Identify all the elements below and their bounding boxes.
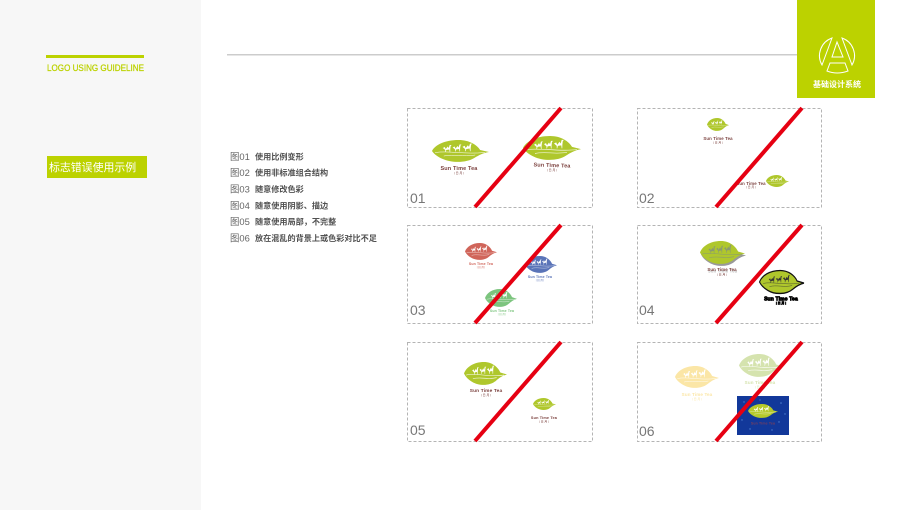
corner badge: basic design system <box>797 0 875 98</box>
list of misuse rules: 图06 <box>230 232 250 243</box>
logo: distorted: | 日 月 | <box>547 168 557 172</box>
section title: logo using guideline: LOGO USING GUIDELINE <box>47 63 144 73</box>
logo: green: | 日 月 | <box>498 312 507 316</box>
logo: pale yellow <box>675 366 719 401</box>
logo: red: Sun Time Tea <box>469 262 493 266</box>
panel number: 01 <box>410 190 426 206</box>
logo: correct: | 日 月 | <box>454 171 464 175</box>
logo: correct: | 日 月 | <box>713 140 723 144</box>
cross-out line <box>716 108 802 207</box>
list of misuse rules: 使用比例变形 <box>255 152 304 162</box>
list of misuse rules: 图02 <box>230 167 250 178</box>
logo: pale yellow: Sun Time Tea <box>682 392 713 397</box>
logo: distorted: Sun Time Tea <box>533 162 571 170</box>
cross-out line <box>475 225 561 323</box>
panel: 04 shadow and outline <box>638 225 822 324</box>
heading tag: logo misuse examples <box>47 156 147 178</box>
logo: black outline: Sun Time Tea <box>764 296 798 302</box>
logo: drop shadow: Sun Time Tea <box>708 268 738 274</box>
icon: A logo <box>819 38 855 73</box>
logo: drop shadow <box>700 241 746 276</box>
logo: correct: Sun Time Tea <box>470 388 502 394</box>
sidebar panel <box>0 0 201 510</box>
cross-out line <box>475 342 561 441</box>
panel number: 03 <box>410 302 426 318</box>
panel number: 05 <box>410 422 426 438</box>
panel number: 02 <box>639 190 655 206</box>
logo: red: | 日 月 | <box>477 265 486 269</box>
logo: correct: | 日 月 | <box>481 393 491 397</box>
logo: blue: | 日 月 | <box>536 278 545 282</box>
logo on busy blue photo: Sun Time Tea <box>751 422 775 426</box>
logo: pale yellow: | 日 月 | <box>692 397 702 401</box>
panel: 06 poor background contrast <box>638 342 822 442</box>
cross-out line <box>475 108 561 207</box>
list of misuse rules: 图01 <box>230 151 250 162</box>
cross-out line <box>716 342 802 441</box>
logo: incomplete: | 日 月 | <box>539 420 549 424</box>
list of misuse rules: 放在混乱的背景上或色彩对比不足 <box>255 233 377 243</box>
list of misuse rules <box>230 151 377 243</box>
logo: drop shadow: Sun Time Tea <box>707 267 737 272</box>
logo: correct: Sun Time Tea <box>703 136 733 141</box>
list of misuse rules: 图03 <box>230 184 250 194</box>
logo: correct <box>464 362 507 397</box>
panel: 03 altered colours <box>408 225 592 324</box>
logo: rearranged <box>736 175 789 189</box>
panel number: 04 <box>639 302 655 318</box>
logo: pale green: | 日 月 | <box>755 385 765 389</box>
logo: green <box>485 289 517 316</box>
panel: 02 non-standard combination <box>638 108 822 208</box>
heading tag: logo misuse examples: 标志错误使用示例 <box>49 160 136 174</box>
logo: incomplete <box>531 398 558 424</box>
logo: correct <box>432 140 489 175</box>
logo on busy blue photo <box>737 396 789 435</box>
logo: drop shadow: | 日 月 | <box>717 272 727 276</box>
logo: blue: Sun Time Tea <box>528 275 552 279</box>
logo: pale green: Sun Time Tea <box>745 380 776 385</box>
list of misuse rules: 使用非标准组合结构 <box>255 168 328 178</box>
cross-out line <box>716 225 802 323</box>
list of misuse rules: 图05 <box>230 216 250 227</box>
logo: black outline: | 日 月 | <box>776 301 786 305</box>
panel: 05 partial use <box>408 342 592 442</box>
list of misuse rules: 随意使用阴影、描边 <box>255 200 328 210</box>
logo: red <box>465 243 497 269</box>
logo: black outline <box>760 270 804 305</box>
logo: green: Sun Time Tea <box>490 309 514 313</box>
logo: blue <box>525 256 557 282</box>
logo: incomplete: Sun Time Tea <box>531 416 558 420</box>
logo: distorted <box>523 136 581 172</box>
list of misuse rules: 随意使用局部，不完整 <box>255 216 336 226</box>
logo: correct <box>703 118 733 144</box>
panel: 01 distorted proportions <box>408 108 592 208</box>
logo: rearranged: Sun Time Tea <box>736 181 766 186</box>
sidebar accent bar <box>46 55 144 58</box>
logo: rearranged: | 日 月 | <box>746 185 756 189</box>
logo: pale green <box>739 354 783 389</box>
list of misuse rules: 图04 <box>230 200 250 211</box>
logo: correct: Sun Time Tea <box>440 166 478 172</box>
list of misuse rules: 随意修改色彩 <box>255 184 304 194</box>
badge label: 基础设计系统 <box>813 79 861 89</box>
panel number: 06 <box>639 423 655 439</box>
